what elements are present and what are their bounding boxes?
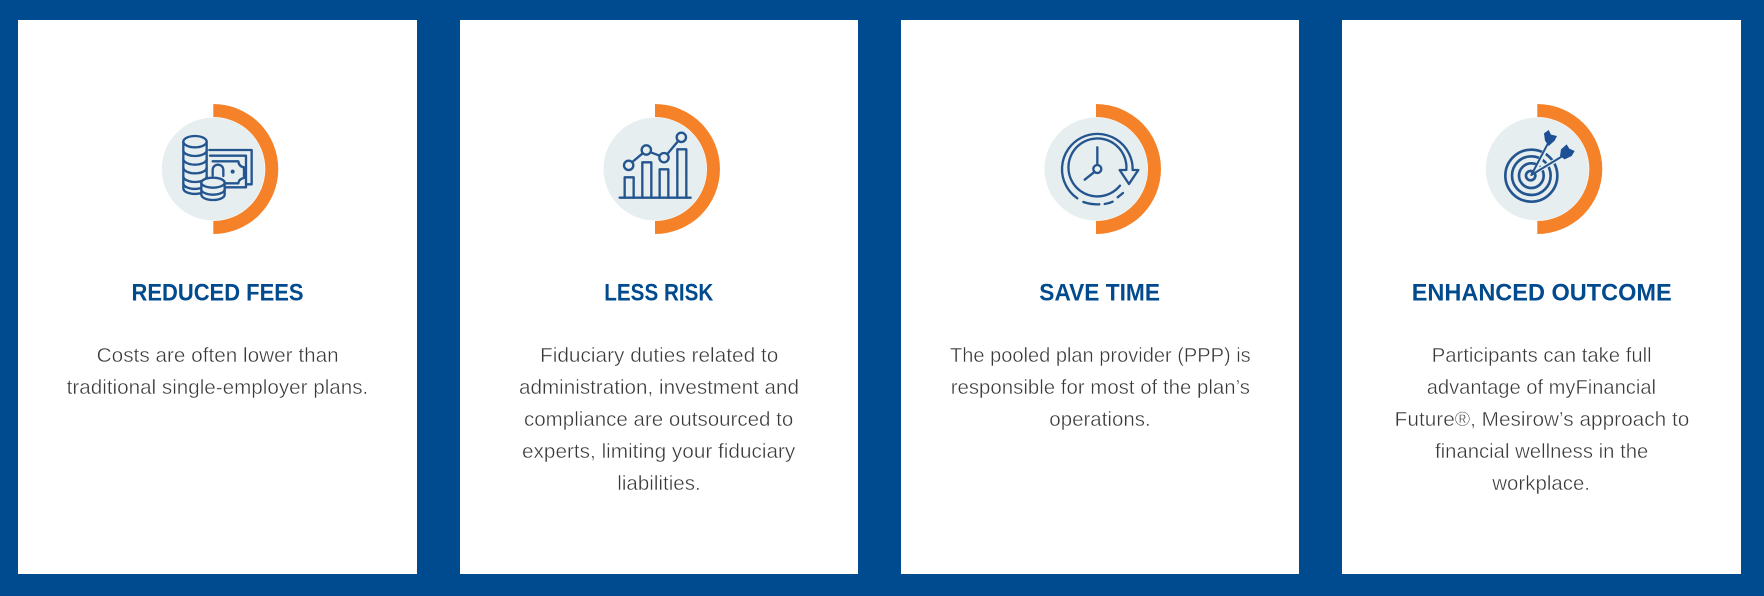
text: less risk description: liabilities. (617, 472, 701, 495)
icon: target with darts (1486, 104, 1602, 234)
heading: save time: SAVE TIME (1039, 280, 1160, 306)
text: less risk description: administration, investment and (519, 376, 799, 399)
text: reduced fees description: traditional single-employer plans. (67, 376, 368, 399)
icon: bar chart with trend line (604, 104, 720, 234)
heading: enhanced outcome: ENHANCED OUTCOME (1412, 280, 1672, 306)
heading: reduced fees: REDUCED FEES (132, 280, 304, 306)
text: enhanced outcome description: Future®, Mesirow’s approach to (1395, 408, 1689, 431)
text: less risk description: Fiduciary duties related to (540, 344, 778, 367)
panel: save time (901, 20, 1299, 574)
text: save time description: The pooled plan provider (PPP) is (950, 344, 1251, 367)
text: enhanced outcome description: financial wellness in the (1435, 440, 1648, 463)
text: less risk description: experts, limiting your fiduciary (522, 440, 796, 463)
text: less risk description: compliance are outsourced to (524, 408, 793, 431)
text: save time description: responsible for most of the plan’s (951, 376, 1250, 399)
panel: reduced fees (18, 20, 417, 574)
panel: enhanced outcome (1342, 20, 1741, 574)
icon: coins and banknote (162, 104, 278, 234)
text: enhanced outcome description: Participants can take full (1432, 344, 1652, 367)
icon: clock with circular arrow (1044, 104, 1161, 234)
text: save time description (950, 344, 1251, 431)
text: reduced fees description (67, 344, 368, 399)
panel: less risk (460, 20, 858, 574)
heading: less risk: LESS RISK (604, 280, 714, 306)
text: reduced fees description: Costs are often lower than (97, 344, 339, 367)
text: less risk description (519, 344, 799, 495)
text: enhanced outcome description: advantage of myFinancial (1427, 376, 1656, 399)
text: enhanced outcome description: workplace. (1491, 472, 1590, 495)
text: save time description: operations. (1049, 408, 1151, 431)
text: enhanced outcome description (1395, 344, 1689, 495)
